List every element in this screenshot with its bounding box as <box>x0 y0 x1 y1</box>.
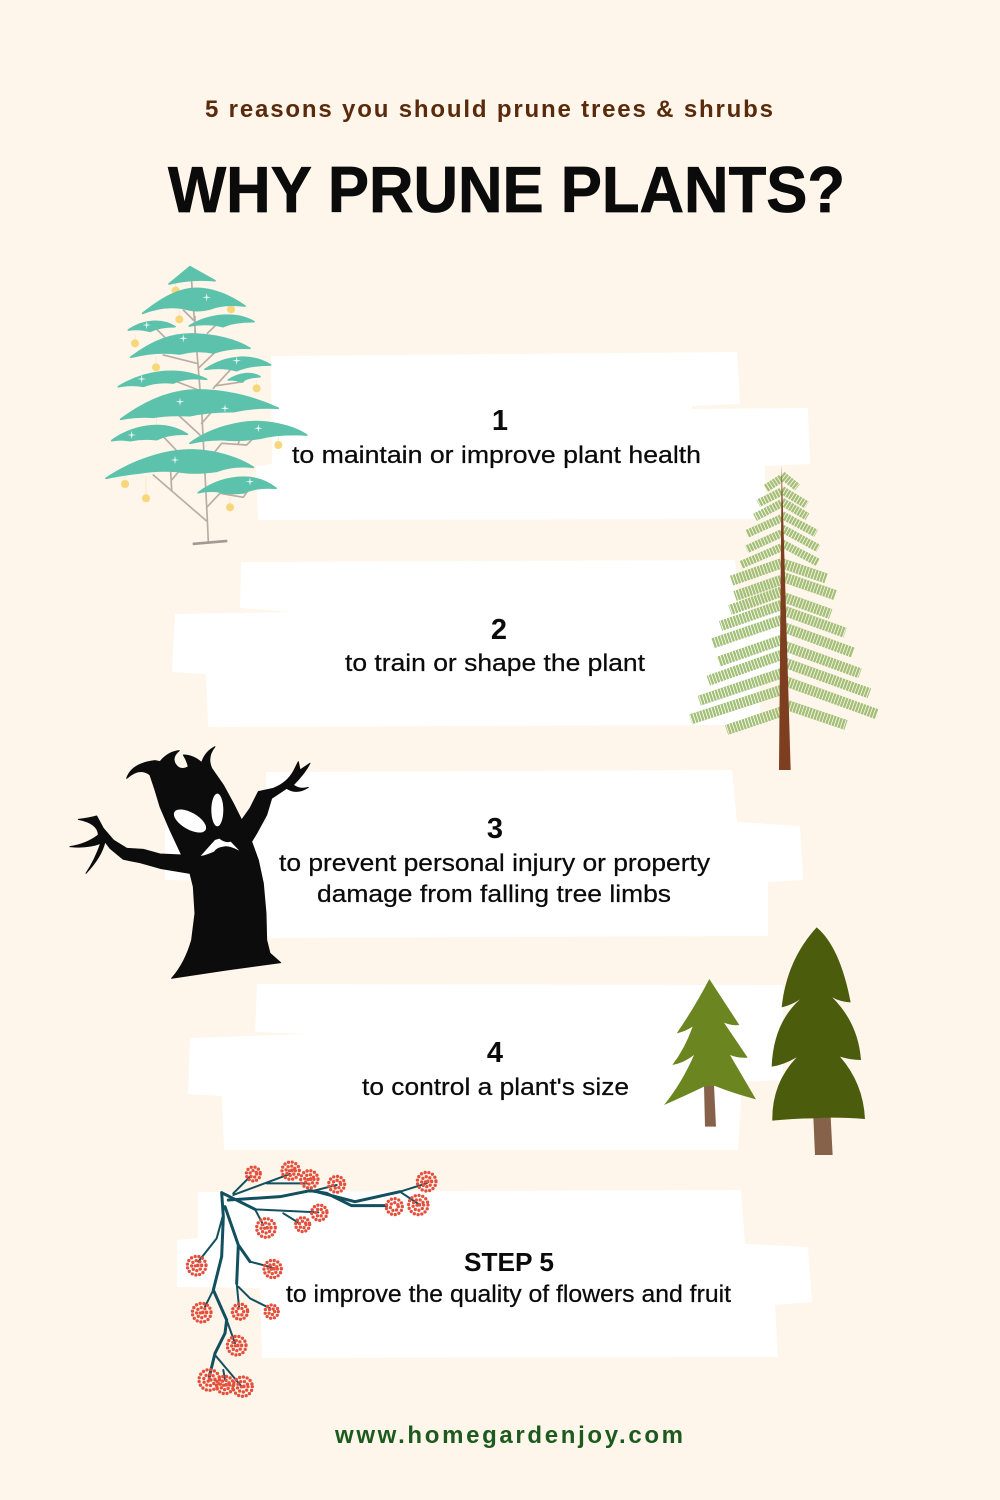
panel: reason 5 <box>177 1190 812 1358</box>
panel: reason 3 <box>165 770 803 938</box>
number 4: 4 <box>487 1037 503 1069</box>
step 5 heading: STEP 5 <box>464 1247 554 1277</box>
number 1: 1 <box>492 405 508 437</box>
reason 2 text: to train or shape the plant <box>345 650 645 677</box>
number 2: 2 <box>491 614 507 646</box>
icon: two green trees <box>664 927 865 1155</box>
reason 3 text: to prevent personal injury or property <box>279 850 710 877</box>
footer website: www.homegardenjoy.com <box>334 1422 683 1449</box>
reason 5 text: to improve the quality of flowers and fruit <box>286 1281 731 1308</box>
icon: berry branch <box>187 1162 436 1396</box>
brush stroke 1 <box>256 352 810 520</box>
brush stroke 2 <box>172 560 792 727</box>
number 3: 3 <box>487 813 503 845</box>
subtitle: 5 reasons you should prune trees & shrubs <box>205 96 773 123</box>
icon: tall fir tree <box>691 465 877 770</box>
reason 1 text: to maintain or improve plant health <box>292 442 701 469</box>
panel: reason 4 <box>188 984 783 1150</box>
brush stroke 3 <box>165 770 803 938</box>
brush stroke 5 <box>177 1190 812 1358</box>
title: WHY PRUNE PLANTS? <box>168 154 845 226</box>
brush stroke 4 <box>188 984 783 1150</box>
icon: spooky black tree <box>70 747 310 978</box>
reason 3 text: damage from falling tree limbs <box>317 881 671 908</box>
reason 3 text <box>279 850 710 908</box>
icon: teal tree with lanterns <box>106 267 307 544</box>
panel: reason 2 <box>172 560 792 727</box>
panel: reason 1 <box>256 352 810 520</box>
reason 4 text: to control a plant's size <box>362 1074 629 1101</box>
